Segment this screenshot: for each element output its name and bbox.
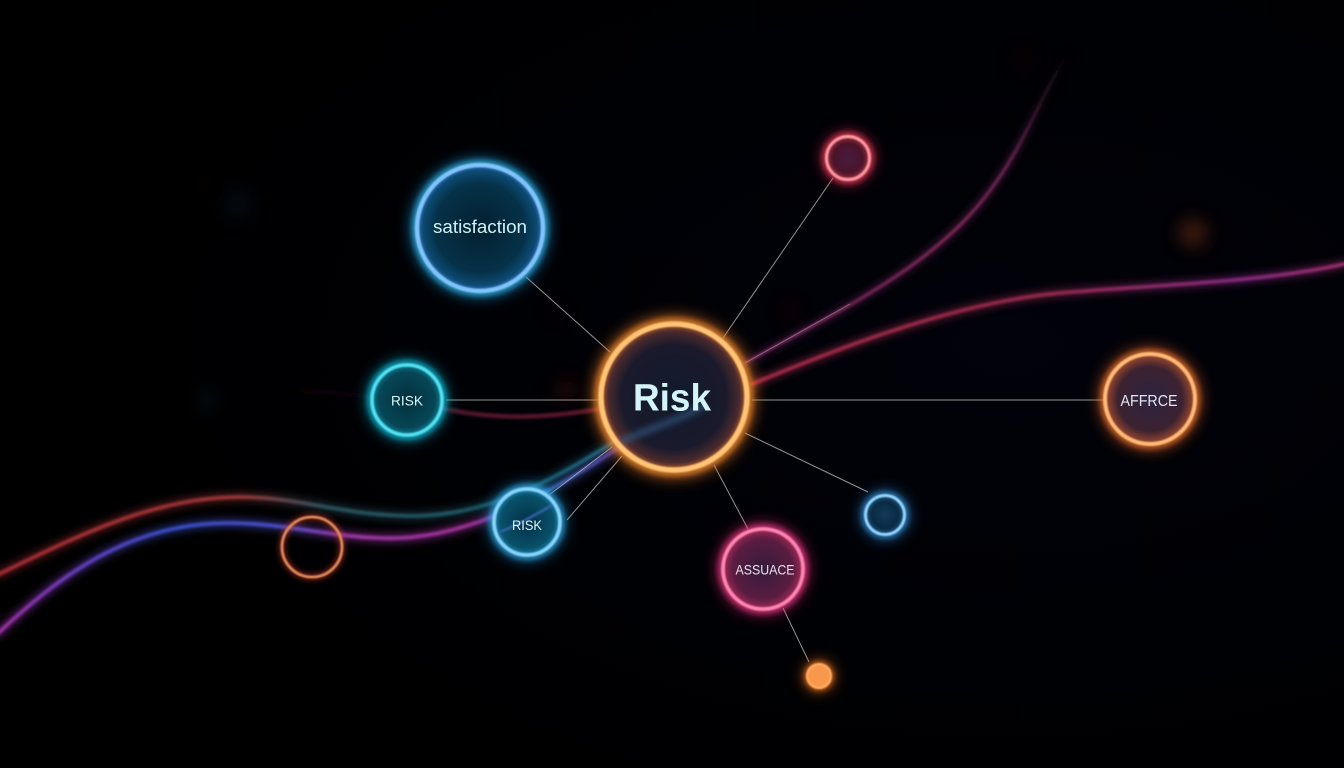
node: central Risk: [598, 321, 750, 473]
node: RISK blue: [492, 487, 562, 557]
node: satisfaction: [415, 163, 545, 293]
flowing light curves: lower left: [0, 390, 625, 636]
flowing light curves: upper right: [745, 56, 1344, 384]
label: AFFRCE: AFFRCE: [1120, 393, 1178, 410]
label: satisfaction: satisfaction: [433, 217, 527, 237]
node: small hollow orange: [282, 517, 342, 577]
label: Risk central: Risk: [633, 378, 712, 420]
label: RISK cyan: RISK: [391, 392, 424, 408]
light streak through node: [500, 503, 556, 532]
label: ASSUACE: ASSUACE: [736, 562, 794, 578]
decorative blurred specks: [196, 52, 1206, 409]
node: small blue: [864, 494, 906, 536]
node: ASSUACE: [721, 527, 805, 611]
label: RISK blue: RISK: [512, 517, 543, 533]
node: AFFRCE: [1103, 352, 1197, 446]
node: RISK cyan: [370, 363, 444, 437]
connector lines: [446, 178, 1104, 662]
node: small orange dot: [803, 660, 835, 692]
node: top red: [825, 135, 871, 181]
light streak inside node: [620, 405, 705, 442]
